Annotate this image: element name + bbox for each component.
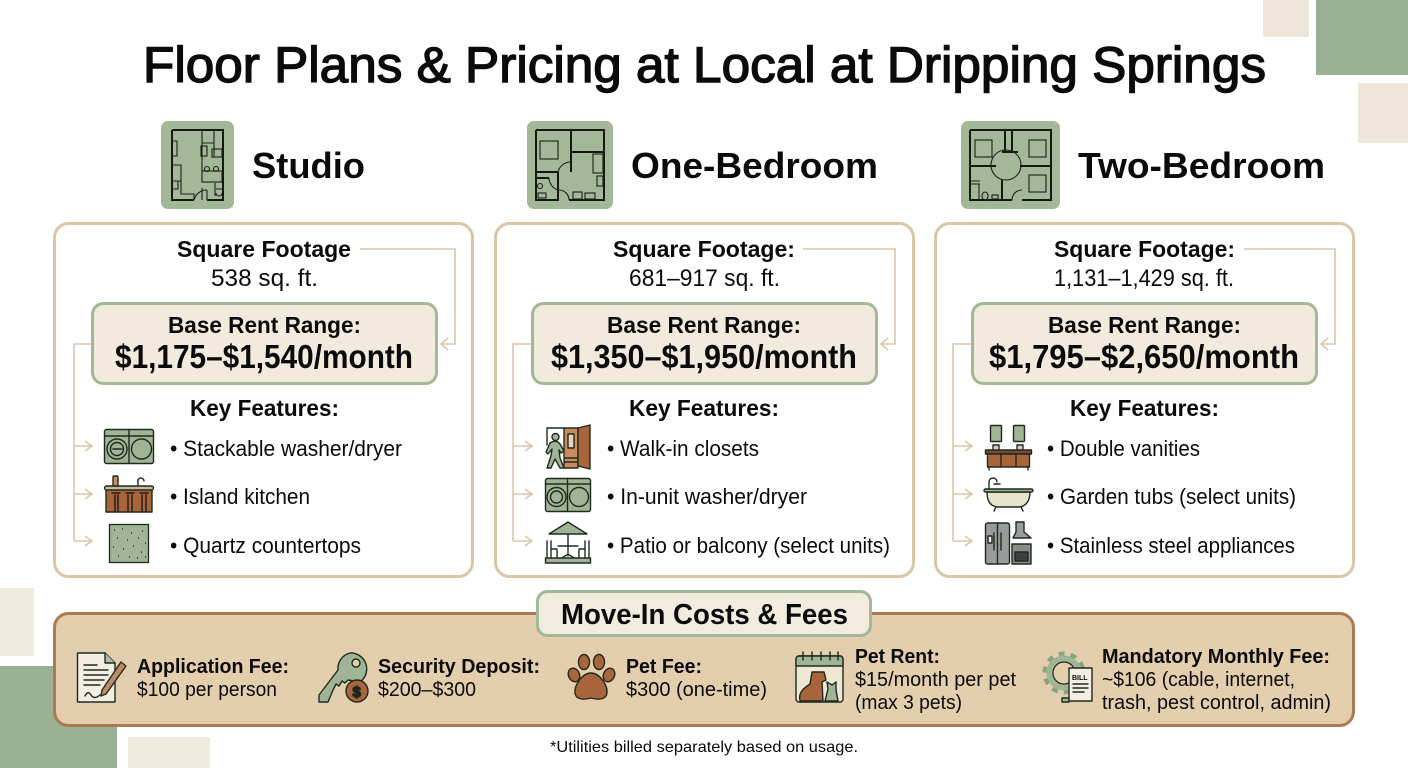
icon: quartz countertop xyxy=(110,524,148,562)
feature text: stainless steel appliances: • Stainless steel appliances xyxy=(1047,533,1295,558)
footnote: *Utilities billed separately based on usage. xyxy=(550,739,858,756)
icon: pet rent calendar xyxy=(796,652,843,702)
rent box: two-bedroom xyxy=(972,304,1316,384)
panel: studio xyxy=(54,121,472,576)
feature text: double vanities: • Double vanities xyxy=(1047,436,1200,461)
fee: security deposit: Security Deposit: xyxy=(378,656,540,678)
rent box: one-bedroom xyxy=(532,304,876,384)
icon: garden tub xyxy=(984,478,1033,511)
square footage: one-bedroom: Square Footage: xyxy=(613,236,795,262)
fee: pet rent: Pet Rent: xyxy=(855,646,940,668)
rent box: two-bedroom: $1,795–$2,650/month xyxy=(989,338,1299,375)
rent box: studio: Base Rent Range: xyxy=(168,312,361,338)
square footage: studio xyxy=(177,236,351,292)
fee: application fee: Application Fee: xyxy=(137,656,289,678)
square footage: two-bedroom xyxy=(1054,236,1235,292)
square footage: one-bedroom: 681–917 sq. ft. xyxy=(629,265,780,292)
square footage: two-bedroom: Square Footage: xyxy=(1054,236,1235,262)
arrow: rent to features xyxy=(74,344,92,546)
arrow: footage to rent xyxy=(360,249,455,350)
rent box: two-bedroom: Base Rent Range: xyxy=(1048,312,1241,338)
icon: studio floor plan xyxy=(161,121,234,209)
panel: two-bedroom xyxy=(936,121,1354,576)
square footage: studio: 538 sq. ft. xyxy=(211,265,318,292)
fee: mandatory monthly fee: Mandatory Monthly Fee: xyxy=(1102,646,1330,668)
icon: walk-in closet xyxy=(546,425,590,469)
arrow: footage to rent xyxy=(803,249,895,350)
feature text: stackable washer/dryer: • Stackable washer/dryer xyxy=(170,436,402,461)
rent box: studio xyxy=(92,304,436,384)
card frame: two-bedroom xyxy=(936,224,1354,576)
arrow: footage to rent xyxy=(1244,249,1335,350)
fee: security deposit: $200–$300 xyxy=(378,679,476,701)
feature text: island kitchen: • Island kitchen xyxy=(170,484,310,509)
fee: application fee xyxy=(137,656,289,701)
heading: two-bedroom: Two-Bedroom xyxy=(1078,145,1325,186)
heading: move-in costs and fees xyxy=(538,592,870,636)
fee: pet rent: (max 3 pets) xyxy=(855,692,962,714)
heading: key features: Key Features: xyxy=(1070,395,1219,421)
icon: key with coin: $ xyxy=(352,684,362,701)
rent box: one-bedroom: $1,350–$1,950/month xyxy=(551,338,857,375)
heading: key features: Key Features: xyxy=(190,395,339,421)
square footage: two-bedroom: 1,131–1,429 sq. ft. xyxy=(1054,265,1234,292)
rent box: studio: $1,175–$1,540/month xyxy=(115,338,413,375)
icon: island kitchen xyxy=(104,476,154,512)
heading: key features: Key Features: xyxy=(629,395,779,421)
panel: one-bedroom xyxy=(496,121,914,576)
icon: double vanity xyxy=(986,426,1032,470)
icon: stainless steel appliances xyxy=(986,522,1031,564)
icon: gear and bill xyxy=(1045,654,1092,702)
card frame: studio xyxy=(54,224,472,576)
panel: move-in costs and fees xyxy=(54,592,1354,726)
fee: mandatory monthly fee xyxy=(1102,646,1331,714)
fee: pet fee: $300 (one-time) xyxy=(626,679,767,701)
fee: mandatory monthly fee: ~$106 (cable, internet, xyxy=(1102,669,1295,691)
icon: application document and pen xyxy=(78,653,126,702)
fee: pet fee: Pet Fee: xyxy=(626,656,702,678)
title: Floor Plans & Pricing at Local at Dripping Springs xyxy=(143,37,1266,93)
icon: key with coin xyxy=(319,653,368,702)
icon: two-bedroom floor plan xyxy=(961,121,1060,209)
square footage: studio: Square Footage xyxy=(177,236,351,262)
panel background xyxy=(54,614,1354,726)
icon: one-bedroom floor plan xyxy=(527,121,613,209)
feature text: walk-in closets: • Walk-in closets xyxy=(607,436,759,461)
feature text: garden tubs: • Garden tubs (select units) xyxy=(1047,484,1296,509)
fee: pet rent: $15/month per pet xyxy=(855,669,1016,691)
arrow: rent to features xyxy=(513,344,532,546)
icon: gear and bill: BILL xyxy=(1072,675,1088,682)
fee: pet fee xyxy=(626,656,767,701)
fee: mandatory monthly fee: trash, pest control, admin) xyxy=(1102,692,1331,714)
feature text: in-unit washer/dryer: • In-unit washer/dryer xyxy=(607,484,807,509)
feature text: patio or balcony: • Patio or balcony (select units) xyxy=(607,533,890,558)
heading: move-in costs and fees: Move-In Costs & Fees xyxy=(561,599,848,631)
heading: studio: Studio xyxy=(252,145,365,186)
fee: pet rent xyxy=(855,646,1016,714)
rent box: one-bedroom: Base Rent Range: xyxy=(607,312,801,338)
icon: in-unit washer and dryer xyxy=(546,478,590,512)
fee: security deposit xyxy=(378,656,540,701)
icon: paw print xyxy=(566,654,617,699)
heading: one-bedroom: One-Bedroom xyxy=(631,145,878,186)
icon: washer and dryer xyxy=(104,430,154,464)
square footage: one-bedroom xyxy=(613,236,795,292)
card frame: one-bedroom xyxy=(496,224,914,576)
feature text: quartz countertops: • Quartz countertops xyxy=(170,533,361,558)
icon: patio set xyxy=(546,522,590,563)
arrow: rent to features xyxy=(953,344,972,546)
fee: application fee: $100 per person xyxy=(137,679,277,701)
